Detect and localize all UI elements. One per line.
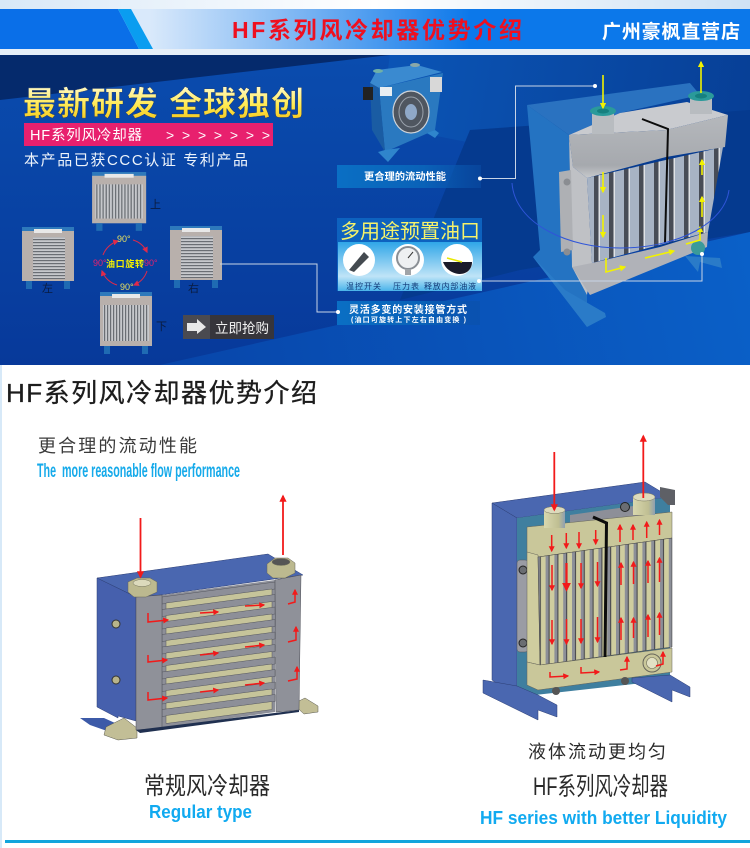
caption: HF cooler chinese: HF系列风冷却器 [533,773,668,801]
certification text: 本产品已获CCC认证 专利产品 [24,152,248,169]
callout: preset oil ports: 压力表 [393,281,419,291]
buy now button [183,315,274,339]
pink label bar: > > > > > > > [166,127,270,143]
callout: preset oil ports [337,218,482,291]
callout: flexible installation [337,301,480,325]
subheading english: The more reasonable flow performance [37,461,240,482]
large cooler photo [527,62,728,327]
caption: regular cooler english: Regular type [149,802,252,822]
pink label bar [24,123,273,146]
yellow flow arrows [603,62,702,272]
diagram: HF cooler [483,436,690,720]
icon: oil drain [441,244,473,276]
mini cooler: top [92,172,161,231]
red flow arrows [550,436,663,677]
caption: uniform flow: 液体流动更均匀 [528,742,666,762]
callout: preset oil ports: 多用途预置油口 [340,220,480,243]
mini cooler: left: 左 [42,282,53,295]
icon: temperature switch [343,244,375,276]
callout: preset oil ports: 温控开关 [346,281,381,291]
blue orbit ring [512,183,729,248]
banner panel [0,55,750,365]
rotation diagram [93,234,158,292]
red flow arrows [140,496,297,700]
connector lines [220,84,704,314]
callout: flow performance: 更合理的流动性能 [364,170,447,183]
top strip [0,0,750,9]
rotation diagram: 油口旋转 [106,258,144,269]
mini cooler: bottom [100,292,167,354]
mini cooler: bottom: 下 [156,321,167,333]
callout: flow performance [337,165,481,188]
buy now button: 立即抢购 [215,320,269,336]
rotation diagram: 90° [117,234,131,244]
mini cooler: right [170,226,222,295]
rotation diagram: 90° [93,258,107,268]
pink label bar: HF系列风冷却器 [30,127,142,144]
callout: flexible installation: 灵活多变的安装接管方式 [349,303,467,316]
header bar [0,9,750,49]
banner headline: 最新研发 全球独创 [23,85,304,122]
callout: preset oil ports: 释放内部油液 [424,281,476,291]
rotation diagram: 90° [144,258,158,268]
callout: flexible installation: (油口可旋转上下左右自由变换 ) [351,315,466,324]
mini cooler: top: 上 [150,198,161,211]
shop name: 广州豪枫直营店 [602,20,740,43]
section title: HF系列风冷却器优势介绍 [6,378,317,408]
diagram: regular cooler [80,496,318,740]
caption: regular cooler chinese: 常规风冷却器 [144,773,270,800]
rotation diagram: 90° [120,282,134,292]
subheading chinese: 更合理的流动性能 [38,436,197,456]
mini cooler: left [22,227,74,295]
small blue cooler photo [363,63,443,162]
icon: pressure gauge [392,244,424,276]
caption: HF cooler english: HF series with better Liquidity [480,808,727,828]
header title: HF系列风冷却器优势介绍 [232,17,522,43]
mini cooler: right: 右 [188,281,199,295]
